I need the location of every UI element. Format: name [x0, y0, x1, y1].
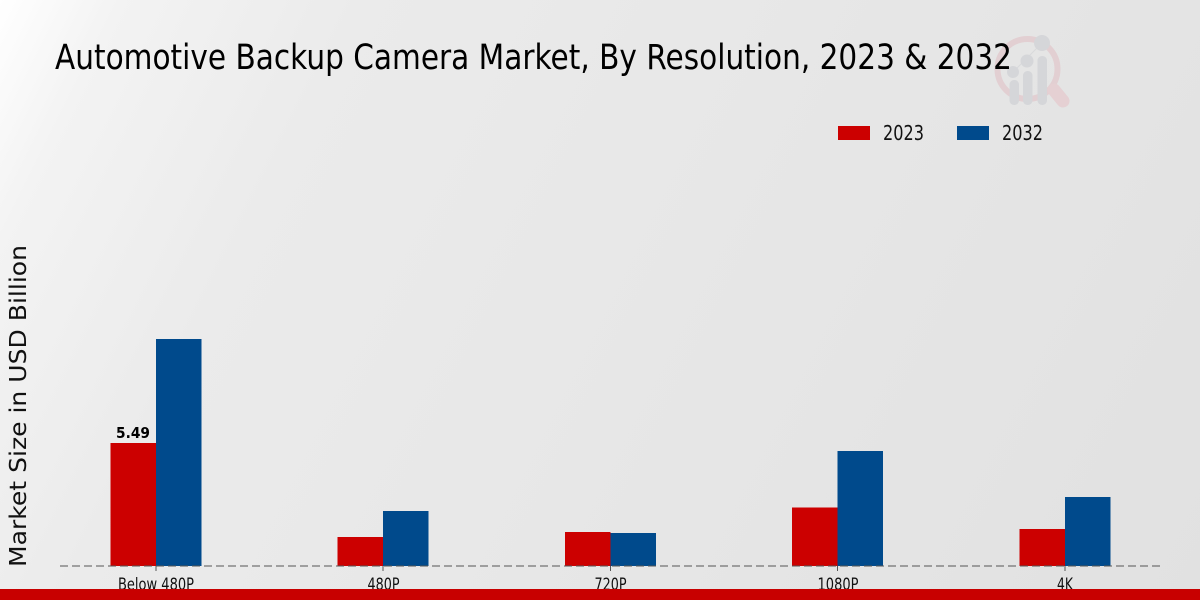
legend item: 2023: 2023 [883, 121, 924, 145]
footer bar [0, 589, 1200, 600]
legend item: 2032: 2032 [1002, 121, 1043, 145]
x axis labels: 1080P [818, 575, 858, 595]
legend item: 2032 [957, 121, 1043, 145]
bars: 720P [565, 532, 656, 566]
legend item: 2023 [838, 121, 924, 145]
bar chart [60, 339, 1160, 595]
bars: Below 480P [110, 339, 202, 566]
x axis baseline [60, 566, 1160, 571]
bars: 1080P [792, 451, 883, 566]
icon: magnifier logo watermark [998, 35, 1063, 105]
bars: 4K [1020, 497, 1110, 566]
x axis labels: 4K [1057, 575, 1074, 595]
x axis labels: Below 480P [118, 575, 194, 595]
y axis label: Market Size in USD Billion [4, 245, 32, 567]
x axis labels: 480P [368, 575, 400, 595]
bars: 480P [338, 511, 428, 566]
title: Automotive Backup Camera Market, By Resolution, 2023 & 2032 [55, 38, 1012, 78]
value label: 5.49: 5.49 [116, 424, 150, 442]
x axis labels [118, 575, 1074, 595]
legend [838, 121, 1043, 145]
x axis labels: 720P [594, 575, 626, 595]
